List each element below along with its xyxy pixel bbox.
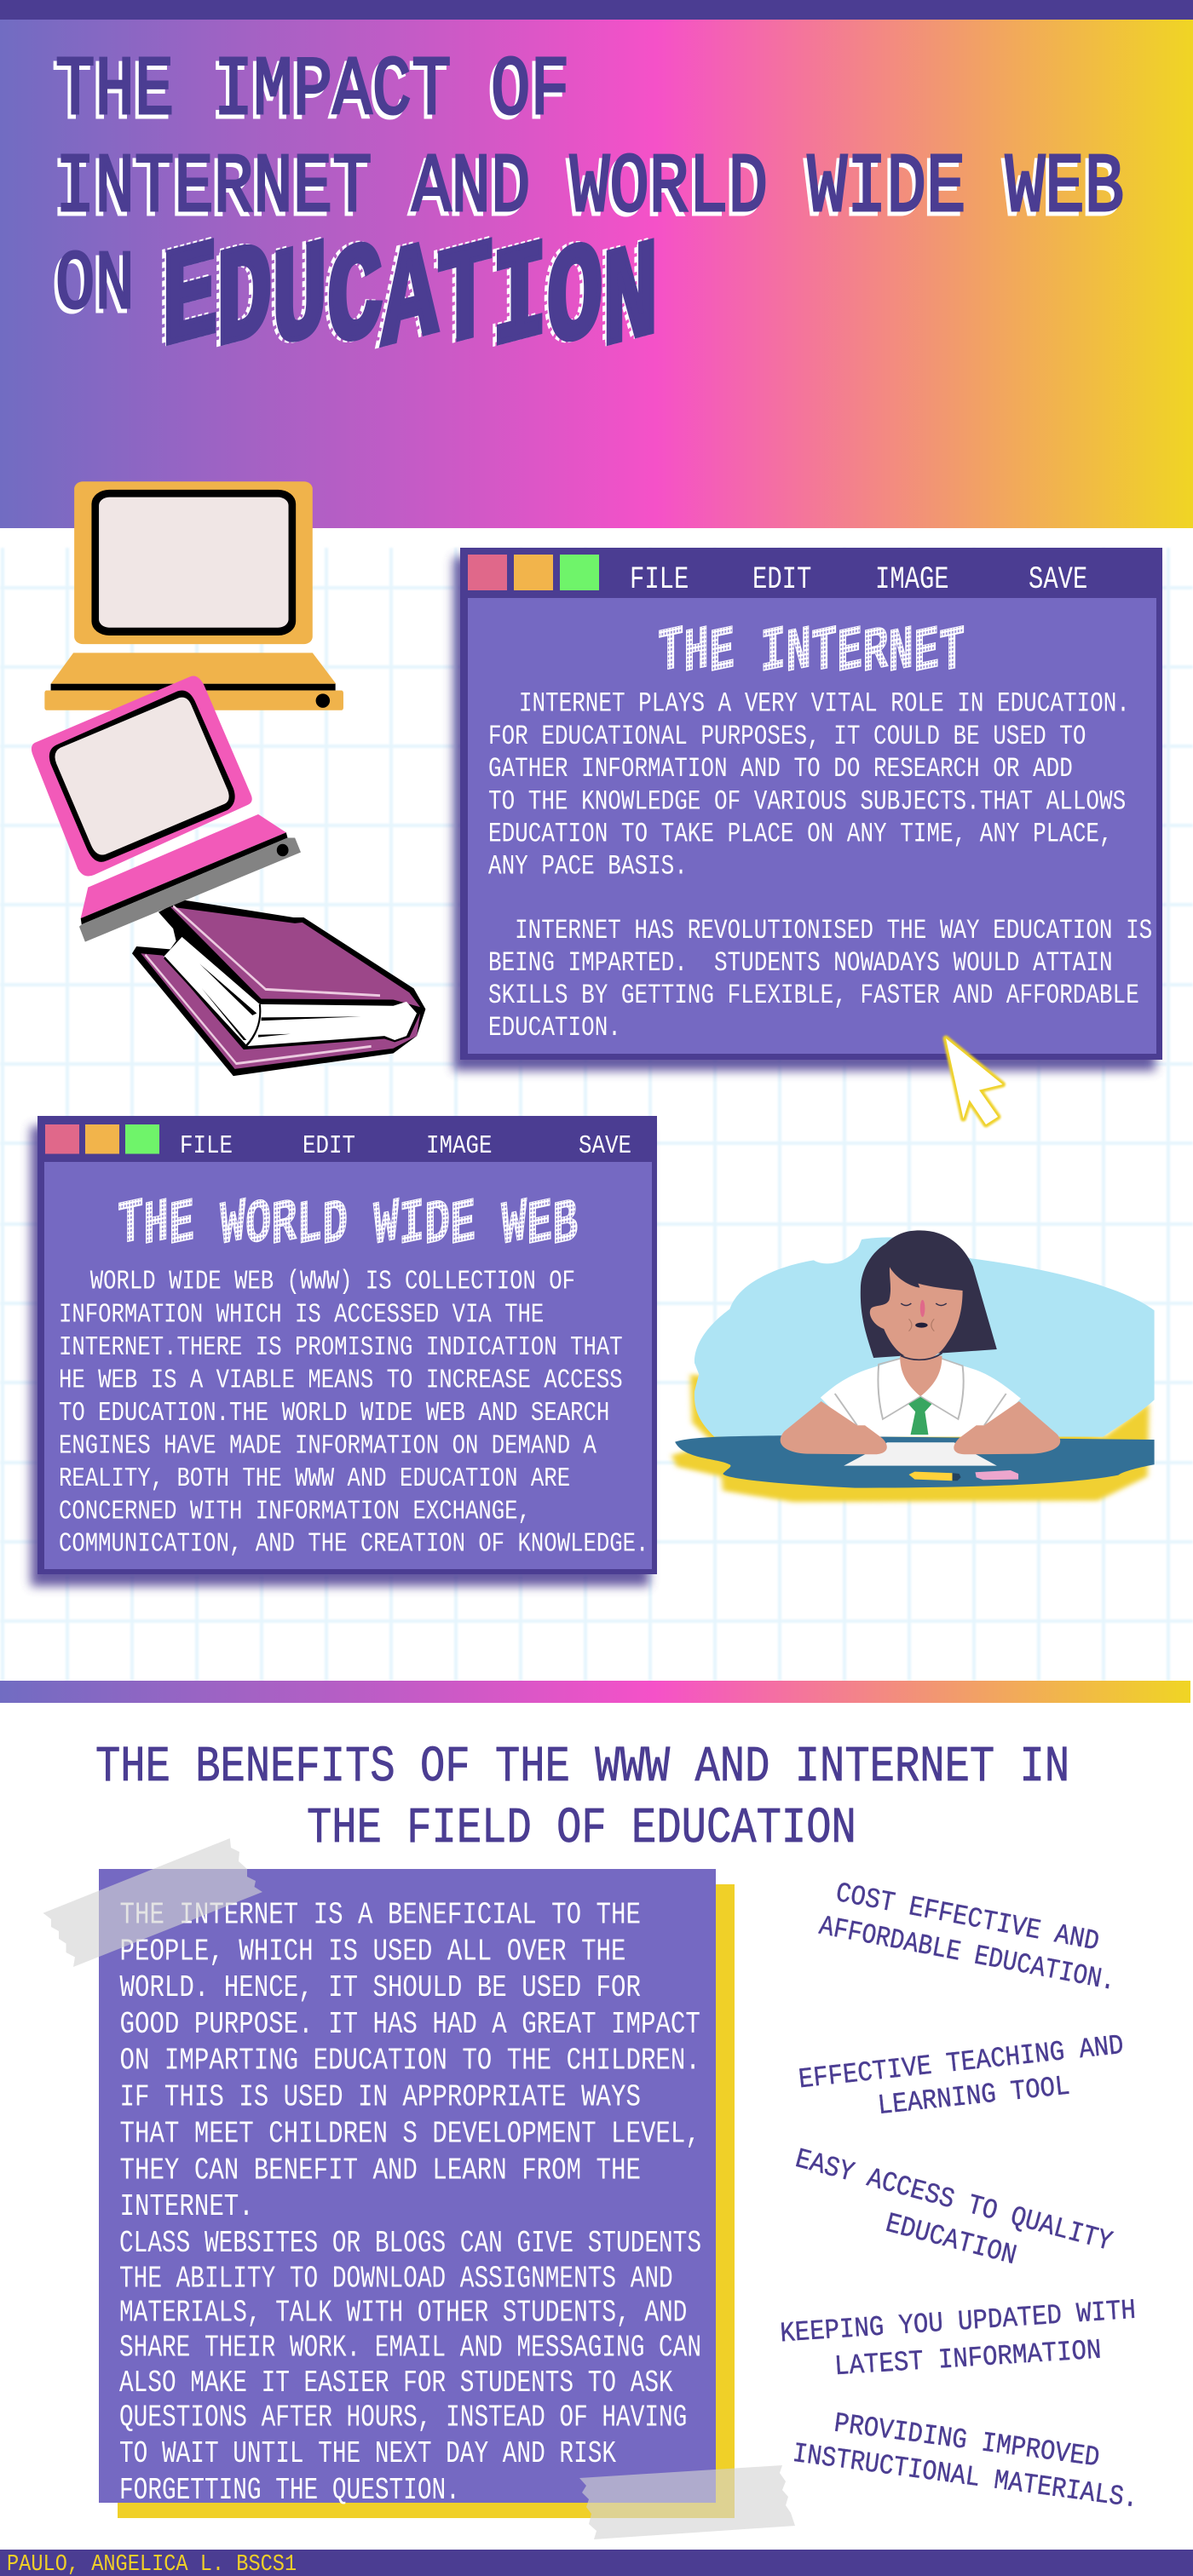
body text: benefits first paragraph: THE INTERNET IS A BENEFICIAL TO THE xyxy=(119,1898,641,1933)
tie xyxy=(908,1397,931,1435)
body text: the internet: INTERNET HAS REVOLUTIONISED THE WAY EDUCATION IS xyxy=(515,914,1152,946)
heading: the world wide web: O xyxy=(245,1187,271,1262)
shirt xyxy=(821,1359,1021,1437)
title line 3: ON: ON xyxy=(55,238,135,333)
title word: EDUCATION: N xyxy=(602,216,658,386)
body text: benefits first paragraph: IF THIS IS USED IN APPROPRIATE WAYS xyxy=(119,2080,641,2115)
panel: the world wide web window xyxy=(31,1116,662,1586)
heading: the internet: H xyxy=(683,615,709,690)
heading: the benefits xyxy=(95,1739,1069,1858)
arms xyxy=(781,1401,1060,1454)
body text: benefits second paragraph: MATERIALS, TALK WITH OTHER STUDENTS, AND xyxy=(119,2295,687,2331)
title word: EDUCATION: I xyxy=(492,216,547,386)
body text: the world wide web: INFORMATION WHICH IS ACCESSED VIA THE xyxy=(59,1299,544,1330)
tape: top left xyxy=(43,1838,262,1967)
title word: EDUCATION: D xyxy=(216,216,272,386)
body text: the internet: INTERNET PLAYS A VERY VITAL ROLE IN EDUCATION. xyxy=(519,687,1130,719)
benefit 5: INSTRUCTIONAL MATERIALS. xyxy=(791,2438,1140,2516)
nose xyxy=(920,1300,925,1317)
window menu: IMAGE xyxy=(875,561,949,597)
title word: EDUCATION: E xyxy=(158,216,214,386)
panel: the internet window xyxy=(453,548,1166,1071)
window menu: SAVE xyxy=(579,1130,631,1161)
body text: the internet: SKILLS BY GETTING FLEXIBLE, FASTER AND AFFORDABLE xyxy=(488,979,1139,1011)
title word: EDUCATION: A xyxy=(378,216,434,386)
title line 1: THE IMPACT OF xyxy=(52,48,567,143)
title line 2: INTERNET AND WORLD WIDE WEB xyxy=(52,145,1121,240)
body text: benefits first paragraph: GOOD PURPOSE. IT HAS HAD A GREAT IMPACT xyxy=(119,2007,700,2042)
benefit 4: KEEPING YOU UPDATED WITH xyxy=(779,2295,1137,2350)
title word: EDUCATION: C xyxy=(327,216,383,386)
body text: benefits second paragraph: THE ABILITY TO DOWNLOAD ASSIGNMENTS AND xyxy=(119,2261,673,2297)
body text: benefits second paragraph: FORGETTING THE QUESTION. xyxy=(119,2473,460,2508)
body text: benefits second paragraph: SHARE THEIR WORK. EMAIL AND MESSAGING CAN xyxy=(119,2330,701,2366)
illustration: student at desk xyxy=(671,1230,1155,1502)
body text: the world wide web: REALITY, BOTH THE WWW AND EDUCATION ARE xyxy=(59,1463,570,1494)
title word: EDUCATION: N xyxy=(599,216,654,386)
heading: the internet: T xyxy=(811,615,837,690)
heading: the internet: R xyxy=(862,615,889,690)
heading: the internet: E xyxy=(709,615,735,690)
window menu xyxy=(180,1130,631,1161)
heading: the world wide web: E xyxy=(527,1187,552,1262)
heading: the internet: T xyxy=(658,615,683,690)
body text: benefits first paragraph: PEOPLE, WHICH IS USED ALL OVER THE xyxy=(119,1934,625,1969)
collar lines xyxy=(835,1359,1006,1425)
body text: benefits second paragraph: TO WAIT UNTIL THE NEXT DAY AND RISK xyxy=(119,2436,617,2471)
body text: benefits first paragraph: THEY CAN BENEFIT AND LEARN FROM THE xyxy=(119,2153,641,2188)
body text: the internet: EDUCATION TO TAKE PLACE ON ANY TIME, ANY PLACE, xyxy=(488,818,1113,849)
title line 1: THE IMPACT OF xyxy=(55,43,570,139)
title word: EDUCATION xyxy=(158,216,658,386)
body text: benefits first paragraph: INTERNET. xyxy=(119,2189,254,2224)
title xyxy=(52,43,1124,386)
heading: the world wide web: H xyxy=(143,1187,169,1262)
body text: the world wide web: ENGINES HAVE MADE INFORMATION ON DEMAND A xyxy=(59,1430,597,1461)
heading: the world wide web: W xyxy=(373,1187,400,1262)
heading: the world wide web: L xyxy=(297,1187,322,1262)
title line 3: ON: ON xyxy=(52,242,131,337)
window buttons xyxy=(468,555,599,590)
heading: the world wide web: R xyxy=(271,1187,297,1262)
heading: the internet: I xyxy=(760,615,786,690)
blue blob xyxy=(694,1237,1155,1437)
heading: the world wide web: E xyxy=(169,1187,194,1262)
footer bar xyxy=(0,2550,1193,2576)
list: benefits xyxy=(779,1877,1140,2516)
icon: cursor arrow xyxy=(946,1038,1002,1124)
window menu: EDIT xyxy=(303,1130,355,1161)
body text: the internet: FOR EDUCATIONAL PURPOSES, IT COULD BE USED TO xyxy=(488,720,1086,752)
heading: the world wide web: W xyxy=(501,1187,527,1262)
title word: EDUCATION: T xyxy=(434,216,489,386)
benefit 4: LATEST INFORMATION xyxy=(833,2335,1103,2383)
body text: the internet: ANY PACE BASIS. xyxy=(488,850,688,882)
title word: EDUCATION: C xyxy=(324,216,379,386)
benefit 1: AFFORDABLE EDUCATION. xyxy=(816,1912,1118,1998)
heading: the internet xyxy=(658,615,965,690)
cheeks xyxy=(909,1319,934,1331)
body text: the internet: TO THE KNOWLEDGE OF VARIOUS SUBJECTS.THAT ALLOWS xyxy=(488,785,1126,817)
window menu: SAVE xyxy=(1029,561,1087,597)
desk xyxy=(675,1435,1155,1488)
eraser xyxy=(975,1470,1018,1480)
title line 2: INTERNET AND WORLD WIDE WEB xyxy=(55,141,1124,236)
body text: the world wide web: CONCERNED WITH INFORMATION EXCHANGE, xyxy=(59,1496,531,1527)
title word: EDUCATION: A xyxy=(382,216,437,386)
mouth xyxy=(915,1323,928,1328)
chin line xyxy=(901,1353,942,1360)
window menu xyxy=(630,561,1087,597)
window buttons xyxy=(45,1124,159,1153)
title word: EDUCATION: E xyxy=(162,216,217,386)
body text: benefits second paragraph: CLASS WEBSITES OR BLOGS CAN GIVE STUDENTS xyxy=(119,2226,701,2261)
icon: book xyxy=(132,900,425,1076)
window menu: EDIT xyxy=(752,561,811,597)
heading: the benefits: THE BENEFITS OF THE WWW AND INTERNET IN xyxy=(95,1739,1069,1797)
hair xyxy=(861,1230,997,1358)
body text: benefits first paragraph: WORLD. HENCE, IT SHOULD BE USED FOR xyxy=(119,1970,641,2005)
title word: EDUCATION: I xyxy=(488,216,544,386)
body text: the world wide web: TO EDUCATION.THE WORLD WIDE WEB AND SEARCH xyxy=(59,1398,609,1429)
neck xyxy=(900,1356,942,1396)
body text: the world wide web: COMMUNICATION, AND THE CREATION OF KNOWLEDGE. xyxy=(59,1528,648,1560)
benefit 1: COST EFFECTIVE AND xyxy=(833,1877,1102,1958)
gradient divider band xyxy=(0,1681,1190,1703)
purple card xyxy=(99,1869,716,2503)
tape: bottom right xyxy=(579,2465,795,2539)
body text: benefits first paragraph: ON IMPARTING EDUCATION TO THE CHILDREN. xyxy=(119,2044,700,2079)
body text: the internet: GATHER INFORMATION AND TO DO RESEARCH OR ADD xyxy=(488,752,1073,785)
heading: the internet: E xyxy=(913,615,939,690)
yellow backdrop xyxy=(671,1374,1150,1502)
title word: EDUCATION: T xyxy=(437,216,493,386)
benefit 2: EFFECTIVE TEACHING AND xyxy=(797,2030,1126,2096)
title word: EDUCATION: D xyxy=(213,216,268,386)
heading: the internet: N xyxy=(786,615,811,690)
icon: pink laptop xyxy=(32,676,301,942)
body text: benefits second paragraph: QUESTIONS AFTER HOURS, INSTEAD OF HAVING xyxy=(119,2400,687,2435)
header gradient band xyxy=(0,20,1193,528)
heading: the internet: E xyxy=(837,615,862,690)
body text: the world wide web: HE WEB IS A VIABLE MEANS TO INCREASE ACCESS xyxy=(59,1365,623,1396)
heading: the world wide web: D xyxy=(424,1187,450,1262)
title word: EDUCATION: U xyxy=(268,216,324,386)
window menu: IMAGE xyxy=(426,1130,492,1161)
title word: EDUCATION: U xyxy=(272,216,327,386)
benefit 4 xyxy=(779,2295,1137,2383)
icon: orange laptop xyxy=(44,481,343,710)
body text: the world wide web: WORLD WIDE WEB (WWW) IS COLLECTION OF xyxy=(90,1266,575,1297)
heading: the world wide web xyxy=(118,1187,578,1262)
heading: the internet: N xyxy=(888,615,913,690)
heading: the benefits: THE FIELD OF EDUCATION xyxy=(307,1801,856,1858)
benefit 3: EASY ACCESS TO QUALITY xyxy=(792,2143,1115,2259)
body text: the internet: BEING IMPARTED. STUDENTS NOWADAYS WOULD ATTAIN xyxy=(488,946,1113,979)
benefit 3: EDUCATION xyxy=(882,2208,1019,2273)
heading: the world wide web: I xyxy=(399,1187,424,1262)
yellow shadow card xyxy=(118,1884,735,2518)
heading: the world wide web: B xyxy=(552,1187,578,1262)
benefit 5: PROVIDING IMPROVED xyxy=(833,2408,1101,2475)
top bar xyxy=(0,0,1193,20)
paper xyxy=(844,1442,997,1466)
heading: the world wide web: D xyxy=(322,1187,348,1262)
eyes xyxy=(901,1303,947,1305)
face xyxy=(870,1267,963,1360)
body text: the world wide web: INTERNET.THERE IS PROMISING INDICATION THAT xyxy=(59,1332,623,1363)
benefit 2: LEARNING TOOL xyxy=(876,2071,1071,2123)
title word: EDUCATION: O xyxy=(547,216,602,386)
heading: the world wide web: E xyxy=(450,1187,475,1262)
window menu: FILE xyxy=(180,1130,233,1161)
body text: the internet: EDUCATION. xyxy=(488,1011,621,1044)
panel: benefits description xyxy=(99,1869,735,2518)
window menu: FILE xyxy=(630,561,689,597)
body text: benefits first paragraph: THAT MEET CHILDREN S DEVELOPMENT LEVEL, xyxy=(119,2117,700,2152)
heading: the world wide web: W xyxy=(220,1187,246,1262)
pencil xyxy=(909,1472,953,1481)
title word: EDUCATION: O xyxy=(544,216,599,386)
heading: the internet: T xyxy=(939,615,965,690)
heading: the world wide web: T xyxy=(118,1187,143,1262)
body text: benefits second paragraph: ALSO MAKE IT EASIER FOR STUDENTS TO ASK xyxy=(119,2365,673,2401)
